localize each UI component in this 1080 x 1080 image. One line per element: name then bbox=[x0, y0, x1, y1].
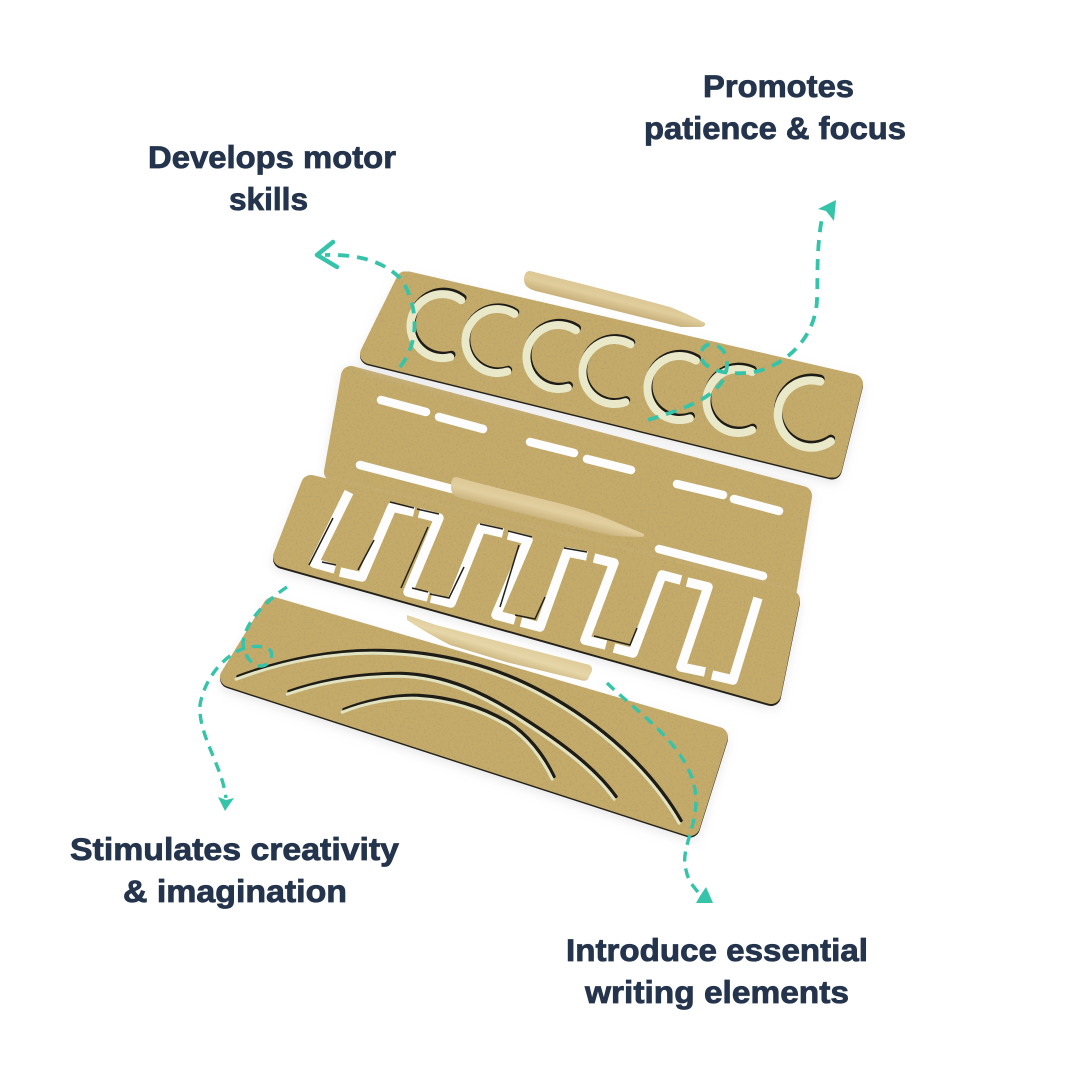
label: introduce essential writing elements bbox=[566, 932, 868, 1010]
wooden stylus: top bbox=[524, 271, 705, 327]
letter C cutouts bbox=[405, 286, 832, 453]
label: promotes patience and focus: Promotes bbox=[703, 68, 854, 104]
label: introduce essential writing elements: Introduce essential bbox=[566, 932, 868, 968]
label: stimulates creativity and imagination bbox=[70, 831, 400, 909]
label: promotes patience and focus bbox=[644, 68, 906, 146]
zigzag cutouts bbox=[314, 492, 758, 680]
board: letter C stencil bbox=[370, 281, 853, 473]
label: develops motor skills bbox=[148, 139, 396, 217]
curved cutouts bbox=[236, 650, 681, 823]
board: zigzag stencil bbox=[283, 485, 790, 699]
board: curved lines stencil bbox=[230, 607, 718, 831]
label: introduce essential writing elements: writing elements bbox=[584, 974, 849, 1010]
wooden stylus: bottom bbox=[407, 615, 592, 681]
label: develops motor skills: skills bbox=[229, 181, 308, 217]
arrow: stimulates creativity bbox=[200, 587, 287, 811]
board: dashed line stencil bbox=[334, 376, 802, 589]
arrow: develops motor skills bbox=[317, 242, 415, 367]
wooden stylus: middle bbox=[451, 477, 644, 537]
label: stimulates creativity and imagination: & imagination bbox=[123, 873, 347, 909]
label: develops motor skills: Develops motor bbox=[148, 139, 396, 175]
cutout shadow edges bbox=[309, 502, 637, 645]
arrow: introduce writing elements bbox=[607, 683, 713, 903]
label: stimulates creativity and imagination: Stimulates creativity bbox=[70, 831, 400, 867]
arrow: promotes patience and focus bbox=[648, 200, 836, 420]
label: promotes patience and focus: patience & focus bbox=[644, 110, 906, 146]
